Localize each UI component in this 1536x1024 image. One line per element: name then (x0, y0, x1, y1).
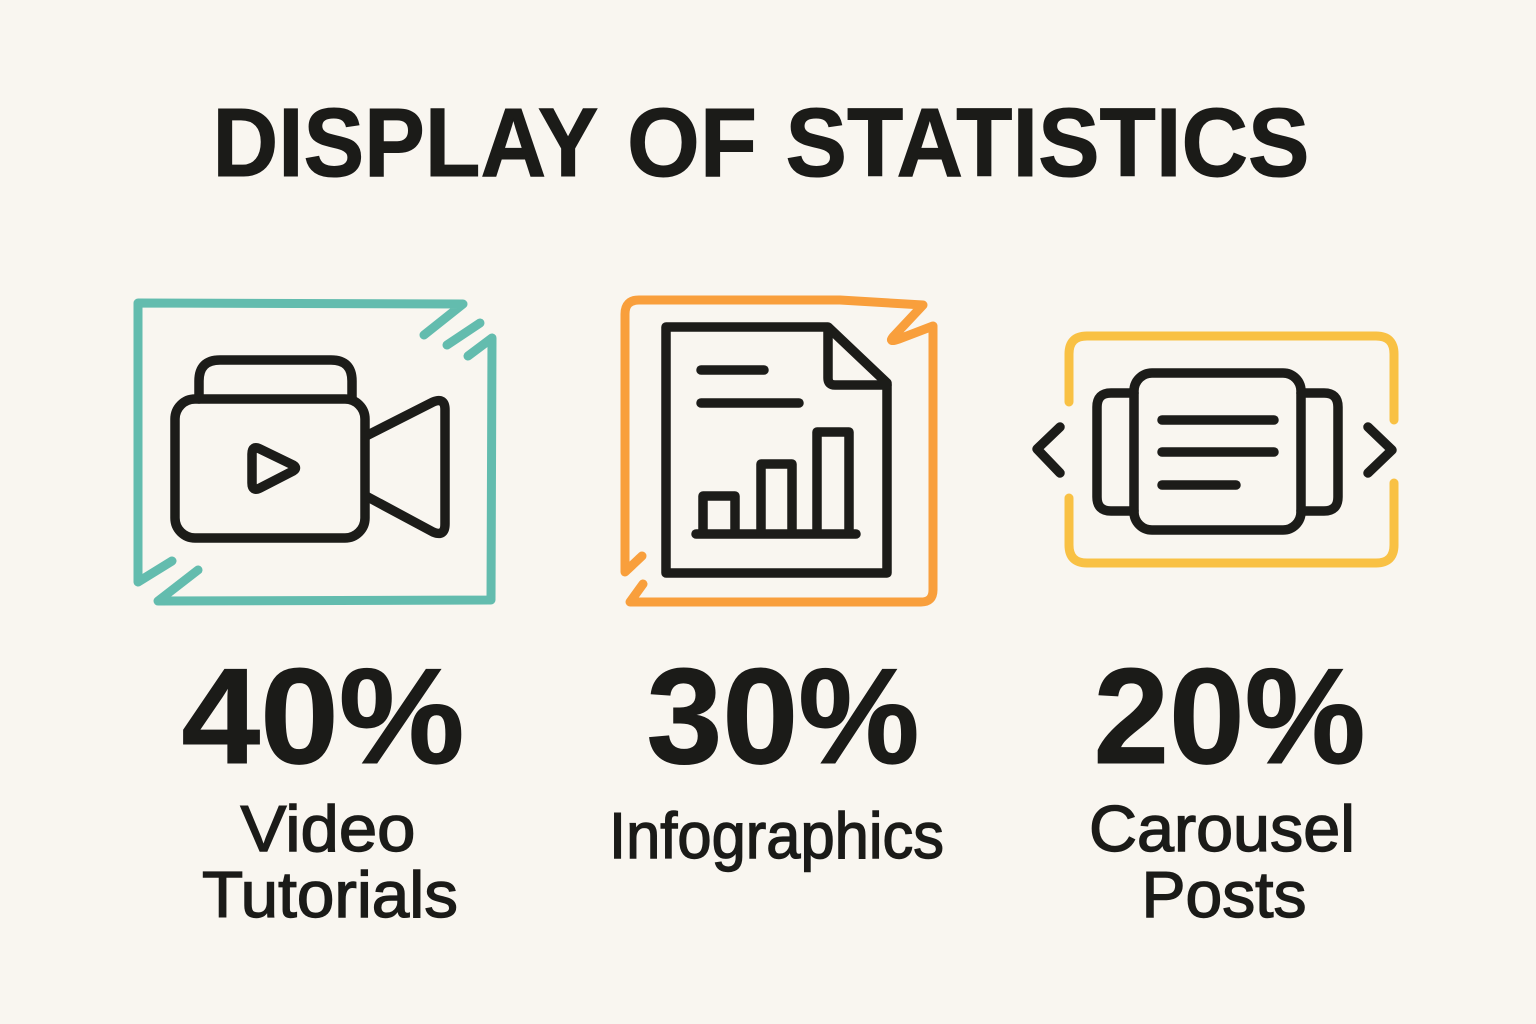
panel: video tutorials (138, 303, 492, 931)
title: OF (627, 88, 757, 197)
label: video tutorials: Tutorials (202, 858, 458, 931)
label: carousel posts: Posts (1142, 858, 1306, 931)
icon frame: orange (625, 300, 933, 602)
icon: video camera (175, 360, 445, 538)
stat: 20%: 20% (1094, 640, 1366, 792)
icon frame: yellow (1069, 336, 1394, 563)
label: video tutorials: Video (240, 792, 416, 865)
icon: document with bar chart (666, 327, 887, 573)
title: STATISTICS (786, 88, 1310, 197)
icon: carousel cards (1037, 373, 1392, 530)
label: carousel posts: Carousel (1089, 792, 1355, 865)
icon frame: teal (138, 303, 492, 601)
panel: carousel posts (1037, 336, 1394, 931)
stat: 30%: 30% (646, 640, 920, 792)
panel: infographics (609, 300, 944, 872)
stat: 40%: 40% (182, 640, 464, 792)
label: infographics: Infographics (609, 799, 944, 872)
title: DISPLAY (212, 88, 598, 197)
